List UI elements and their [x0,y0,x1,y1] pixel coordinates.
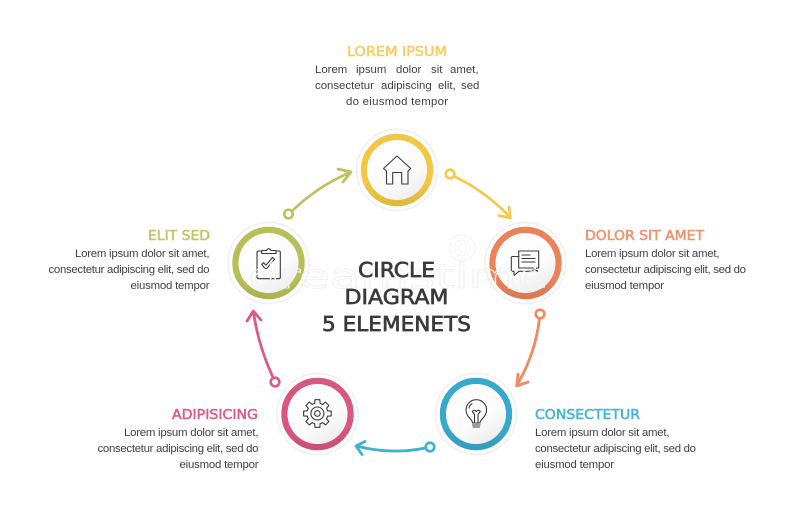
text block: lorem ipsum: sit [431,64,443,76]
text block: lorem ipsum: elit, [438,80,456,92]
node: bottom left pink circle with gear icon [277,374,358,454]
text block: elit sed: consectetur adipiscing elit, sed do [48,264,210,276]
text block: consectetur: Lorem ipsum dolor sit amet, [535,427,670,439]
center title: CIRCLE [358,258,435,282]
heading: dolor sit amet: DOLOR SIT AMET [585,228,705,244]
text block: adipisicing [98,407,259,471]
icon: light bulb [466,400,487,427]
text block: adipisicing: Lorem ipsum dolor sit amet, [124,427,258,439]
arrow: green, left to top [284,169,351,218]
text block: lorem ipsum: sed [461,80,479,92]
heading: elit sed: ELIT SED [148,228,210,244]
text block: lorem ipsum: adipiscing [381,80,432,92]
watermark [248,235,548,297]
text block: lorem ipsum: amet, [450,64,478,76]
text block: consectetur [535,407,696,471]
heading: consectetur: CONSECTETUR [535,407,640,423]
icon: speech bubbles [511,251,539,276]
text block: lorem ipsum: consectetur [315,80,374,92]
text block: lorem ipsum: do eiusmod tempor [346,96,448,108]
arrow: pink, bottom left to left [247,311,279,386]
text block: lorem ipsum: Lorem [315,64,347,76]
arrow: orange, right to bottom right [517,310,544,386]
text block: adipisicing: eiusmod tempor [180,459,259,471]
node: right orange circle with chat icon [485,222,566,304]
text block: elit sed: eiusmod tempor [130,280,210,292]
center title: DIAGRAM [344,285,448,309]
text block: adipisicing: consectetur adipiscing elit, sed do [98,443,258,455]
arrow: yellow, top to right [446,170,510,218]
text block: elit sed: Lorem ipsum dolor sit amet, [75,248,210,260]
text block: lorem ipsum: dolor [396,64,422,76]
text block: dolor sit amet: consectetur adipiscing elit, sed do [585,264,746,276]
node: left green circle with clipboard icon [228,222,309,304]
text block: lorem ipsum [315,44,479,108]
text block: consectetur: consectetur adipiscing elit, sed do [535,443,696,455]
text block: elit sed [48,228,210,292]
watermark: dreamstime [248,257,548,297]
heading: lorem ipsum: LOREM IPSUM [347,44,447,60]
text block: dolor sit amet [585,228,746,292]
node: top yellow circle with house icon [356,130,438,210]
icon: clipboard with check [257,249,280,279]
center title [322,258,471,336]
center title: 5 ELEMENETS [322,312,471,336]
icon: gear [304,400,331,427]
text block: dolor sit amet: eiusmod tempor [585,280,664,292]
text block: dolor sit amet: Lorem ipsum dolor sit amet, [585,248,720,260]
text block: consectetur: eiusmod tempor [535,459,614,471]
heading: adipisicing: ADIPISICING [172,407,258,423]
icon: house [384,156,411,184]
text block: lorem ipsum: ipsum [356,64,386,76]
node: bottom right blue circle with light bulb icon [436,374,516,454]
arrow: blue, bottom right to bottom left [356,442,434,454]
